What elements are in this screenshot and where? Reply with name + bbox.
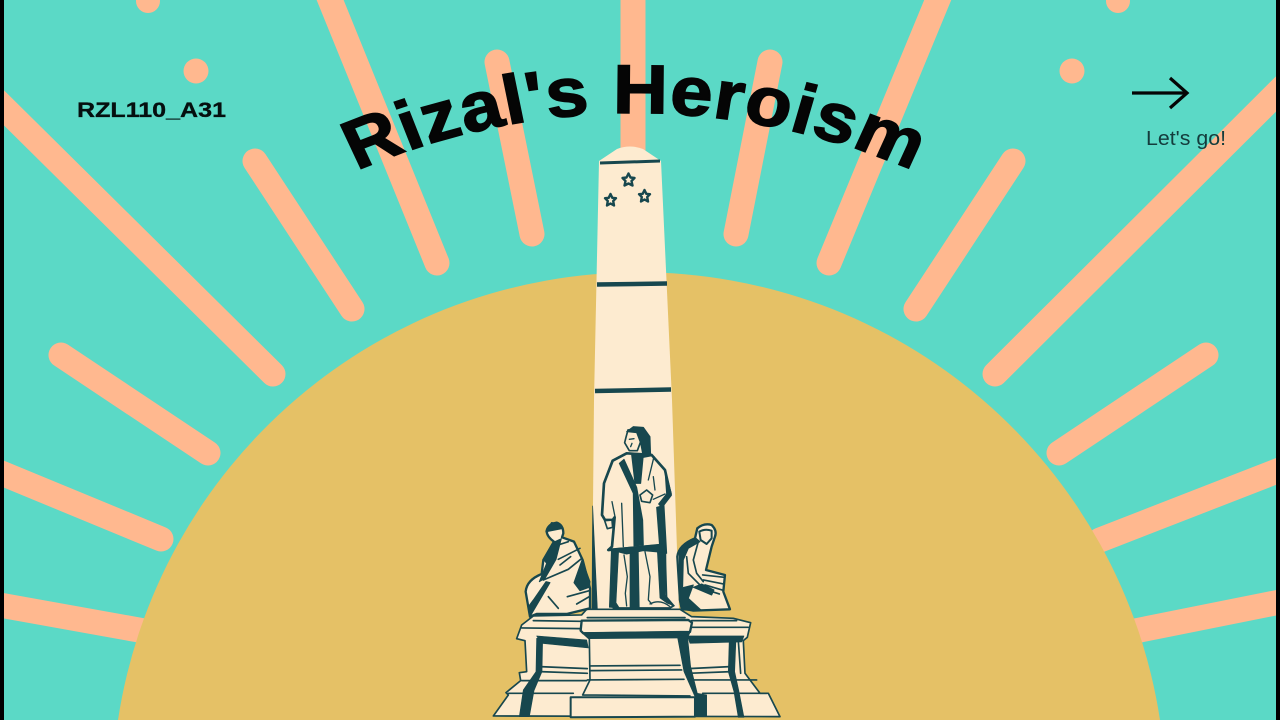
statue: left seated figure [526,523,590,617]
course code label: RZL110_A31 [77,99,226,122]
statue: Rizal standing figure [592,427,675,609]
decorative dots [136,0,1130,84]
title: curved heading: Rizal's Heroism [340,64,921,170]
icon: three stars [605,174,650,206]
let's go label: Let's go! [1146,128,1226,150]
monument pedestal and statues [493,427,780,717]
sun semicircle [118,272,1160,720]
icon: next arrow [1132,78,1187,108]
obelisk [592,146,679,610]
statue: right seated figure [677,524,730,611]
pedestal [493,609,780,717]
